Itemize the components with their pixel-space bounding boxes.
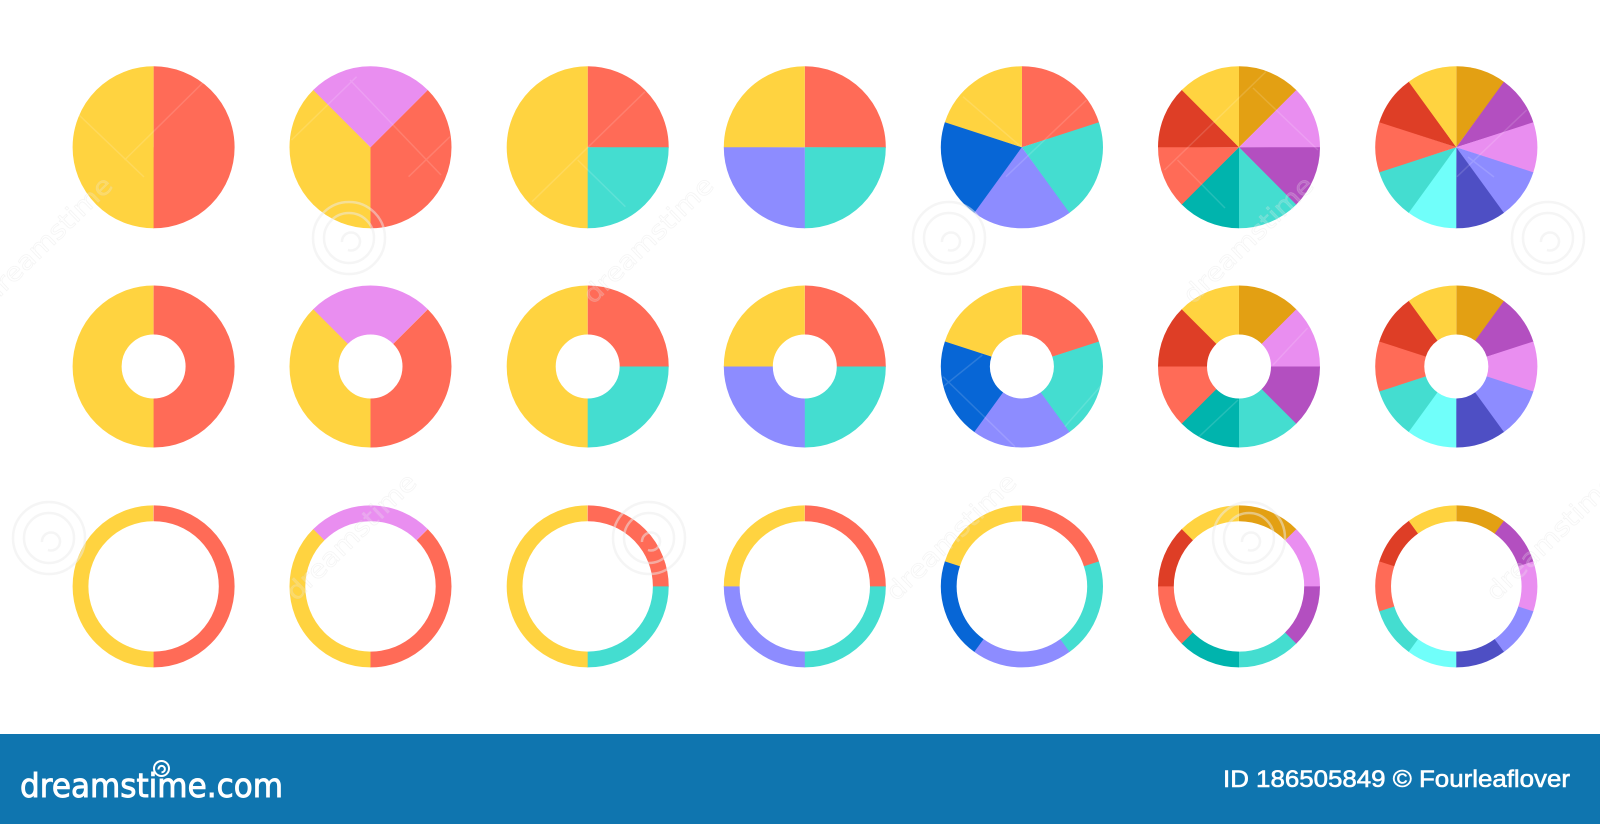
watermark: dreamstime diagonal text: dreamstime xyxy=(1177,170,1319,309)
watermark: dreamstime diagonal text: dreamstime xyxy=(577,170,719,309)
pie: 3 slices with top wedge xyxy=(313,90,428,205)
row: donut charts xyxy=(97,287,1535,446)
donut: 5 slices xyxy=(943,288,1101,445)
ring: 3 slices with top wedge xyxy=(267,483,474,690)
pie: 4 slices xyxy=(764,107,845,188)
donut: 3 slices half and quarters xyxy=(531,310,644,423)
image id and author credit: ID 186505849 © Fourleaflover xyxy=(1223,766,1570,793)
ring: 8 slices xyxy=(1136,483,1342,690)
pie: 10 slices xyxy=(1400,91,1513,204)
watermark: dreamstime diagonal text: dreamstime xyxy=(880,467,1022,606)
ring: 5 slices xyxy=(920,484,1124,689)
watermark: dreamstime diagonal text xyxy=(0,170,1600,606)
donut: 10 slices xyxy=(1377,288,1535,445)
footer banner xyxy=(0,734,1600,824)
row: solid pie charts xyxy=(113,90,1513,205)
pie: 8 slices xyxy=(1182,90,1296,205)
row: thin ring charts xyxy=(81,483,1558,690)
pie: 3 slices half and quarters xyxy=(547,107,628,188)
ring: 4 slices xyxy=(732,513,878,660)
pie: 2 slices xyxy=(113,107,194,188)
ring: 10 slices xyxy=(1354,484,1558,689)
icon: logo spiral xyxy=(154,761,169,776)
ring: 3 slices half and quarters xyxy=(515,513,661,660)
watermark: dreamstime diagonal text: dreamstime xyxy=(280,467,422,606)
watermark: spiral marks xyxy=(13,202,1584,574)
pie: 5 slices xyxy=(965,91,1078,204)
logo text: dreamstime.com xyxy=(20,766,283,805)
donut: 4 slices xyxy=(748,310,861,423)
donut: 3 slices with top wedge xyxy=(291,287,450,446)
donut: 8 slices xyxy=(1159,287,1319,446)
ring: 2 slices xyxy=(81,513,227,660)
donut: 2 slices xyxy=(97,310,210,423)
